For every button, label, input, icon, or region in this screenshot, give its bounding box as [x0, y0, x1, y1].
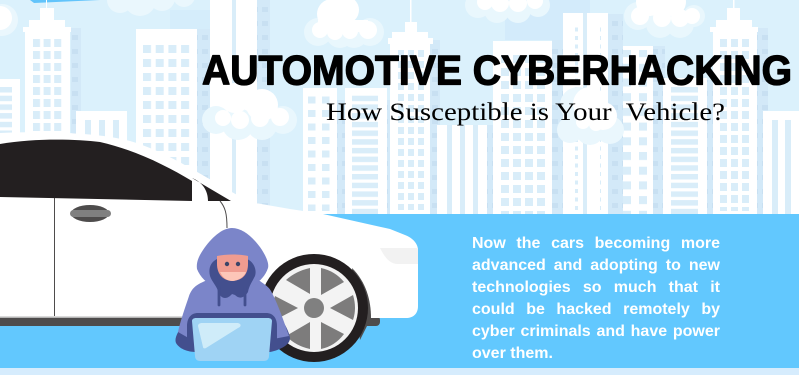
building 12 — [663, 78, 707, 214]
cloud: behind title left — [202, 83, 297, 140]
description text — [472, 235, 720, 362]
sill line — [0, 316, 200, 318]
building 6 — [345, 88, 387, 214]
face — [217, 254, 248, 281]
wheel — [260, 254, 371, 362]
door lines — [54, 198, 227, 316]
car — [0, 132, 418, 362]
car body — [0, 132, 418, 318]
description text: cyber criminals and have power — [472, 323, 720, 340]
cloud: upper centre — [304, 0, 384, 48]
description text: technologies so much that it — [472, 279, 720, 296]
building 7 — [388, 0, 433, 214]
description text: Now the cars becoming more — [472, 235, 720, 252]
door handle — [70, 205, 111, 222]
hoodie body — [178, 281, 289, 340]
hood — [197, 228, 268, 298]
description text: advanced and adopting to new — [472, 257, 720, 274]
hood strings — [219, 287, 245, 305]
building 13 — [710, 0, 758, 214]
building 3 — [136, 29, 197, 179]
building 10 — [563, 13, 608, 214]
eyes — [225, 262, 240, 266]
laptop — [192, 318, 272, 361]
cloud: left edge — [0, 4, 18, 36]
description text: over them. — [472, 345, 553, 362]
underbody — [0, 316, 380, 326]
headlight — [380, 248, 418, 264]
subtitle: How Susceptible is Your Vehicle? — [326, 97, 725, 126]
hacker — [175, 228, 290, 361]
window — [0, 140, 192, 201]
building 2 — [76, 111, 127, 151]
bottom strip — [0, 368, 799, 375]
building 0 — [0, 79, 20, 139]
ground — [0, 214, 799, 368]
sleeves — [175, 320, 290, 352]
building 4 — [210, 0, 257, 214]
cloud: top middle — [465, 0, 550, 23]
building 9 — [493, 41, 552, 214]
description text: could be hacked remotely by — [472, 301, 720, 318]
building 1 — [23, 0, 71, 140]
hood opening — [209, 259, 256, 298]
cloud: top right — [624, 0, 705, 38]
building 11 — [623, 46, 653, 214]
laptop glare — [198, 323, 241, 348]
clouds — [0, 0, 705, 145]
cloud: behind subtitle — [557, 87, 624, 145]
building 8 — [437, 125, 487, 214]
side mirror window — [192, 178, 231, 201]
lower face — [220, 272, 246, 281]
blue streak — [30, 0, 100, 3]
city skyline — [0, 0, 799, 214]
cloud: top left — [107, 0, 195, 16]
building 14 — [763, 111, 799, 214]
laptop back — [187, 313, 277, 350]
building 5 — [303, 88, 337, 214]
